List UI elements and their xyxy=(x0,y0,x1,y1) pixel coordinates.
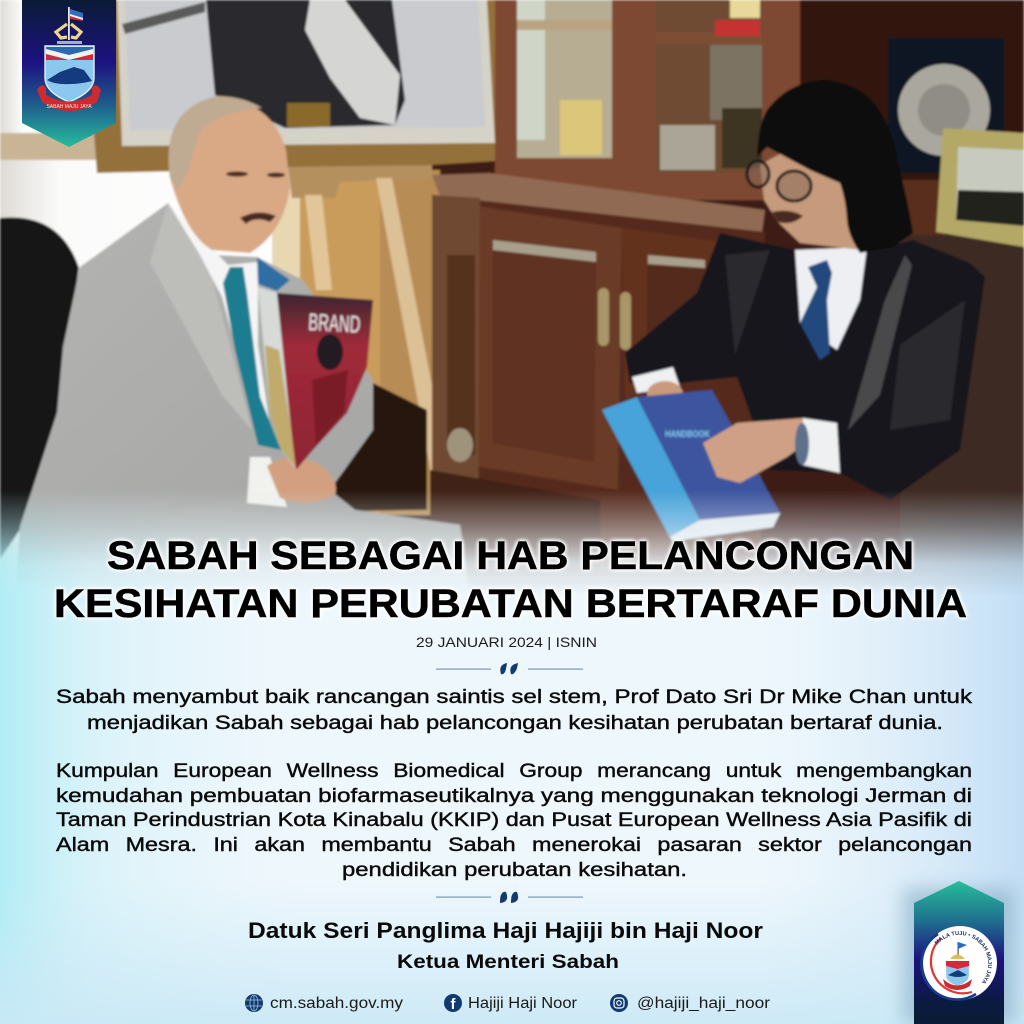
lower door right xyxy=(622,228,745,400)
striped navy tie xyxy=(800,260,832,360)
top left banner with coat of arms xyxy=(22,0,116,147)
shelf trophy plaque and photo frame xyxy=(888,38,1024,247)
grey suit and trousers xyxy=(15,203,470,600)
left shirt cuff xyxy=(632,367,680,393)
social link: facebook xyxy=(444,994,577,1013)
framed portrait drawing xyxy=(93,0,512,173)
icon: sabah crest xyxy=(37,7,101,111)
title xyxy=(54,534,967,626)
paragraph two: Kumpulan European Wellness Biomedical Group merancang untuk mengembangkan xyxy=(56,761,972,782)
hand on book xyxy=(647,381,683,407)
glasses xyxy=(747,161,811,201)
social link: facebook: Hajiji Haji Noor xyxy=(468,995,577,1012)
title line 1: SABAH SEBAGAI HAB PELANCONGAN xyxy=(107,534,914,578)
divider with closing quote marks xyxy=(436,892,583,903)
white shirt xyxy=(168,203,272,440)
shield chevron xyxy=(46,47,93,56)
shield xyxy=(45,46,94,102)
lower door left xyxy=(470,205,622,490)
lapel highlight xyxy=(150,203,252,430)
speaker name: Datuk Seri Panglima Haji Hajiji bin Haji Noor xyxy=(248,918,763,943)
mountain xyxy=(47,67,92,84)
teal tie xyxy=(223,267,281,450)
banner shape xyxy=(22,0,116,147)
emblem circle xyxy=(920,926,997,1001)
head xyxy=(169,97,290,253)
paragraph two xyxy=(56,761,972,881)
flag xyxy=(68,7,83,40)
right glass pane xyxy=(656,0,762,172)
hair xyxy=(169,96,262,190)
satin sheen on the suit xyxy=(848,255,912,430)
cabinet cornice xyxy=(432,173,765,232)
shirt cuff xyxy=(247,457,287,507)
man on the right: prof mike chan xyxy=(602,80,985,541)
eyes and smile xyxy=(226,171,285,224)
white shirt cuff xyxy=(803,418,840,473)
cabinet side column xyxy=(432,195,480,600)
left glass pane xyxy=(517,0,612,158)
soft shadow behind the bottom badge xyxy=(903,888,1015,1024)
book cover title: HANDBOOK xyxy=(665,429,710,439)
black chair xyxy=(0,217,79,560)
icon: instagram xyxy=(610,994,628,1012)
holding hand xyxy=(267,458,336,502)
icon: globe xyxy=(245,994,263,1012)
emblem motto: MALA TUJU • SABAH MAJU JAYA xyxy=(934,931,992,984)
paragraph two: Taman Perindustrian Kota Kinabalu (KKIP) dan Pusat European Wellness Asia Pasifik di xyxy=(56,810,972,831)
motto text: SABAH MAJU JAYA xyxy=(46,104,92,110)
wooden easel xyxy=(288,165,458,520)
divider with opening quote marks xyxy=(436,663,583,674)
paragraph two: pendidikan perubatan kesihatan. xyxy=(342,860,687,881)
crown arms xyxy=(56,24,81,38)
hand over book xyxy=(703,418,810,483)
dark chair arm behind magazine xyxy=(333,383,427,512)
icon: facebook: f xyxy=(450,996,456,1013)
speaker role: Ketua Menteri Sabah xyxy=(397,952,619,973)
blue handbook xyxy=(602,390,780,541)
text panel background fading over the photo bottom xyxy=(0,470,1024,1024)
motto ribbon xyxy=(37,85,101,111)
paragraph one: Sabah menyambut baik rancangan saintis sel stem, Prof Dato Sri Dr Mike Chan untuk xyxy=(56,687,973,708)
door handles xyxy=(598,288,609,346)
black suit xyxy=(625,233,985,500)
wooden cabinet with glass doors xyxy=(430,0,800,600)
photo: meeting of two men in office xyxy=(0,0,1024,600)
paragraph two: Alam Mesra. Ini akan membantu Sabah menerokai pasaran sektor pelancongan xyxy=(56,835,972,856)
date line: 29 JANUARI 2024 | ISNIN xyxy=(416,634,597,650)
wristwatch xyxy=(795,423,809,465)
paragraph one: menjadikan Sabah sebagai hab pelancongan kesihatan perubatan bertaraf dunia. xyxy=(87,713,943,734)
smile xyxy=(772,211,803,223)
banner shape xyxy=(914,881,1004,1024)
paragraph one xyxy=(56,687,973,734)
white shirt xyxy=(795,247,867,350)
paragraph two: kemudahan pembuatan biofarmaseutikalnya yang menggunakan teknologi Jerman di xyxy=(56,786,972,807)
magazine xyxy=(257,257,373,470)
face xyxy=(760,140,862,250)
social link: instagram: @hajiji_haji_noor xyxy=(637,995,770,1012)
office wall and room backdrop xyxy=(0,0,1024,600)
crest base xyxy=(57,41,82,44)
man on the left: chief minister xyxy=(15,96,470,600)
social link: website: cm.sabah.gov.my xyxy=(270,995,403,1012)
title line 2: KESIHATAN PERUBATAN BERTARAF DUNIA xyxy=(54,582,967,626)
magazine masthead: BRAND xyxy=(308,309,361,339)
bottom right banner with emblem xyxy=(914,881,1004,1024)
long black hair xyxy=(757,80,913,253)
